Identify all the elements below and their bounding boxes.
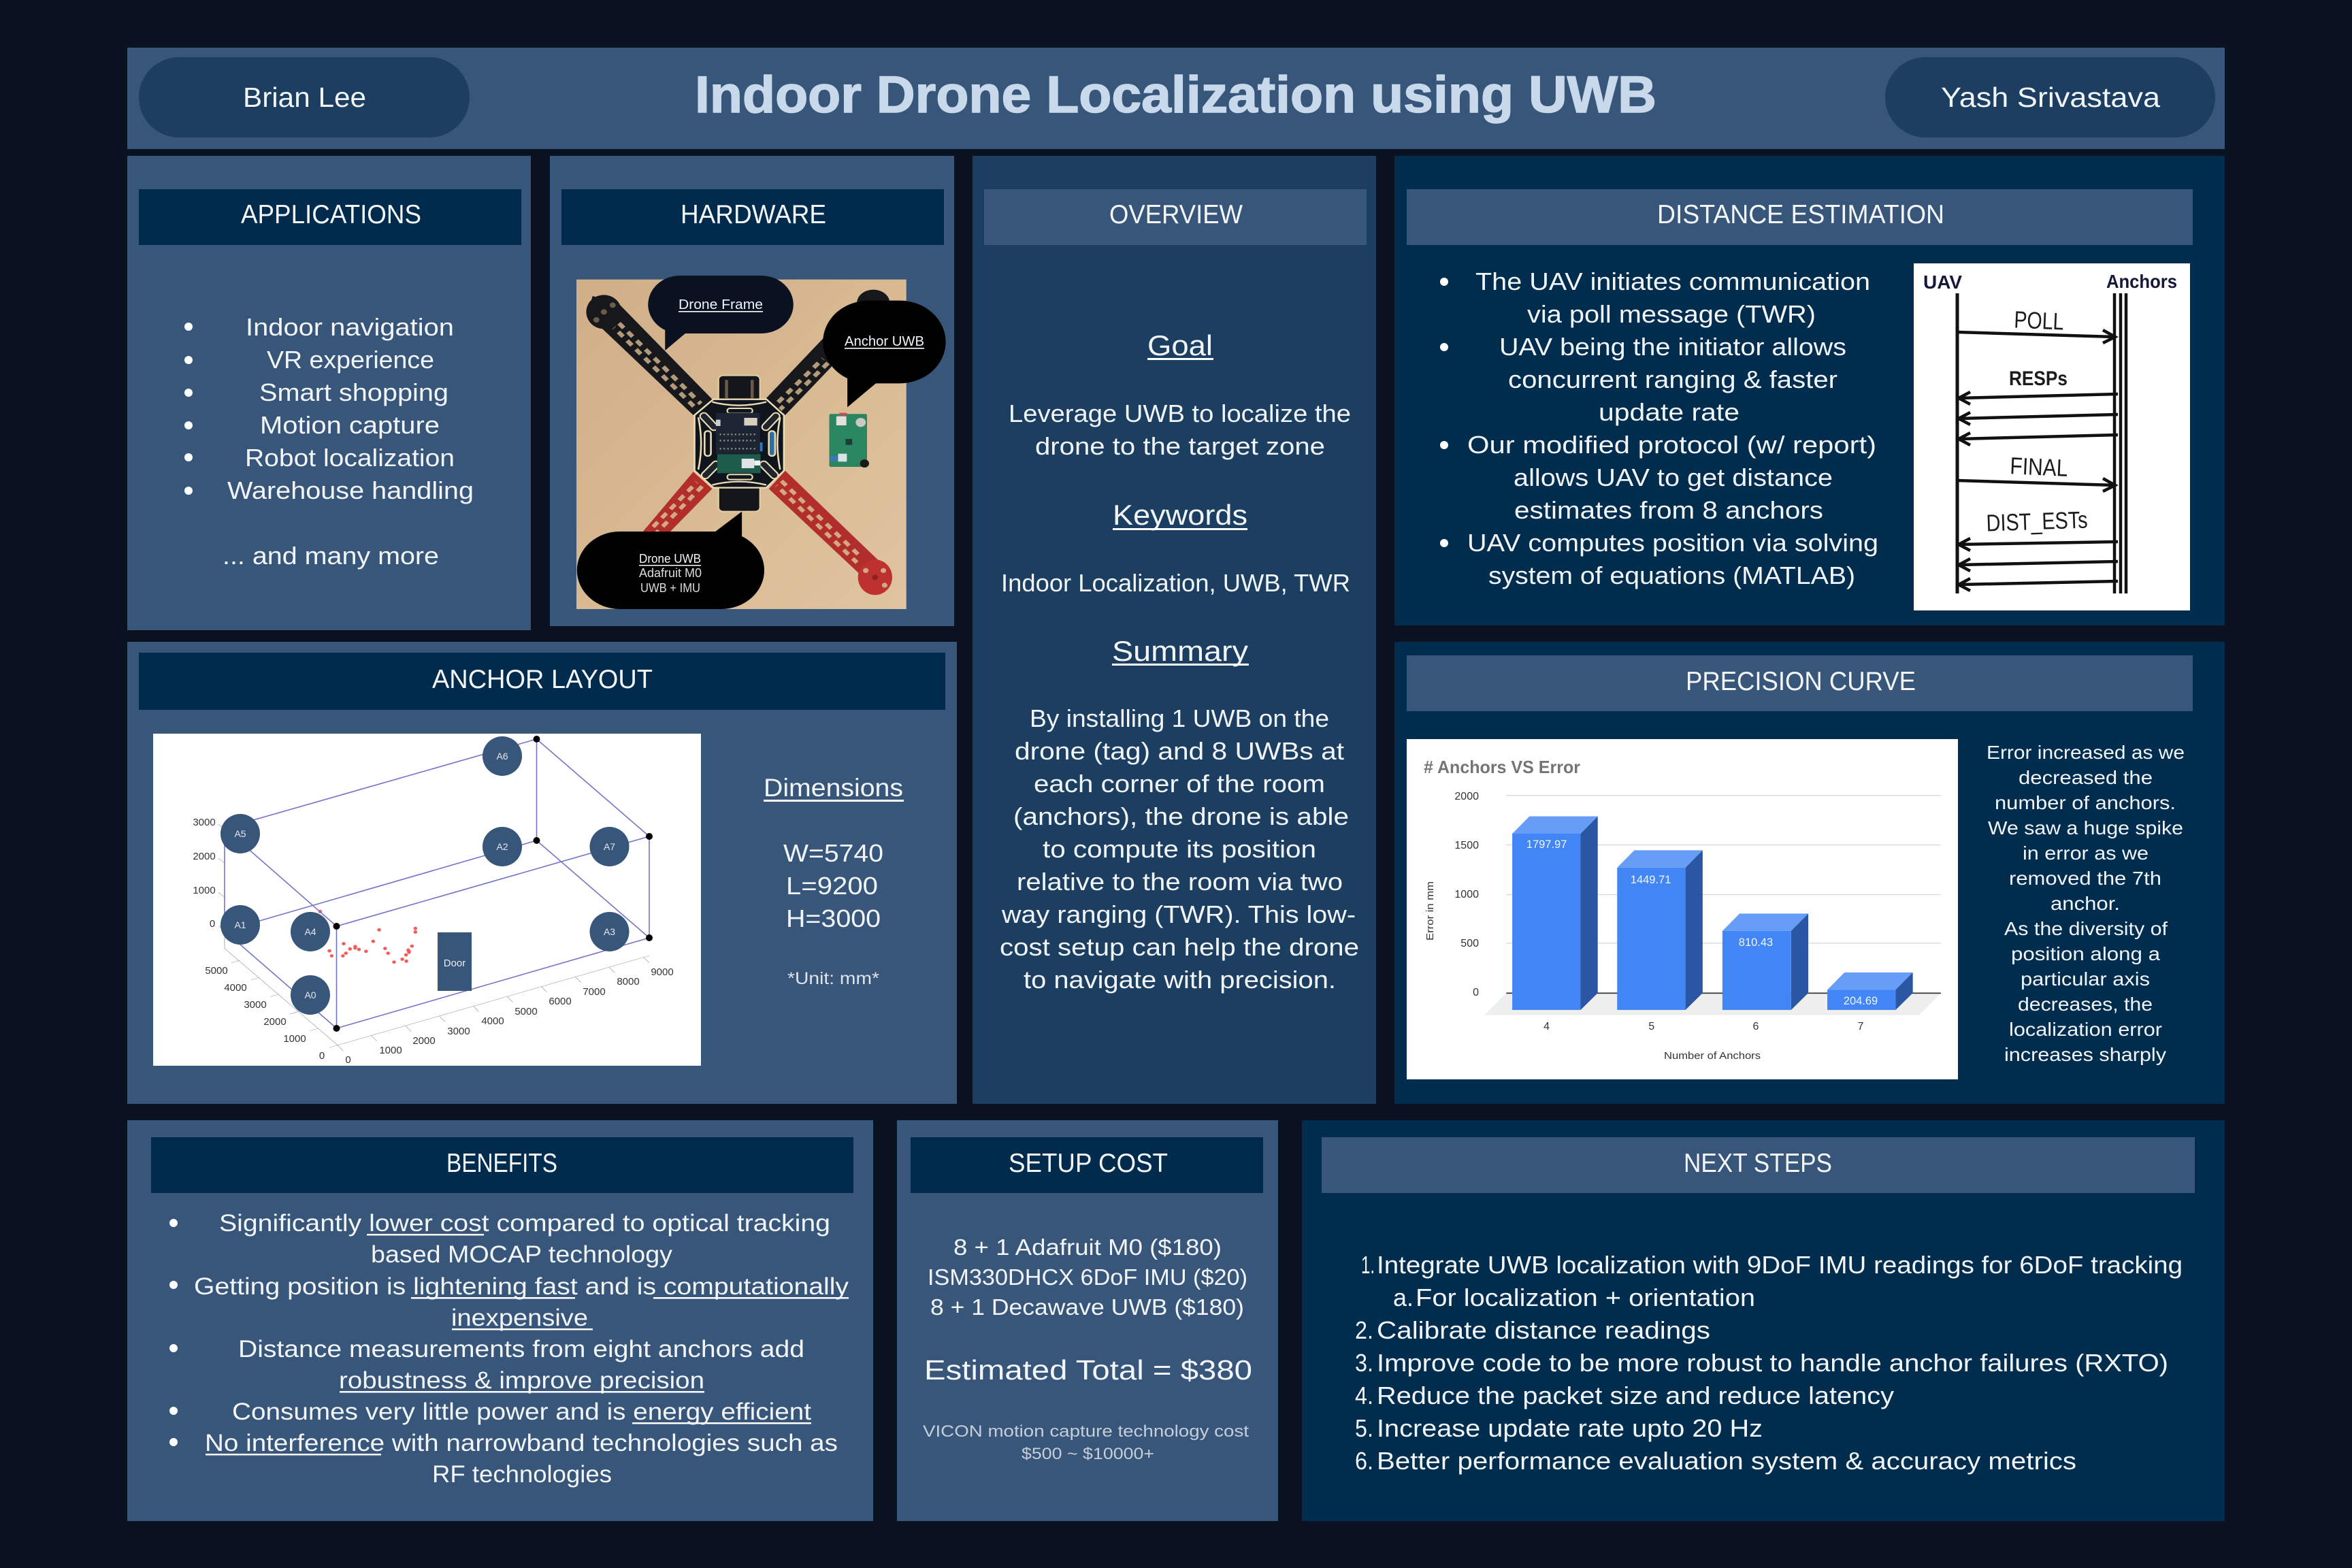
3D anchor plot: A4 — [304, 926, 316, 937]
3D anchor plot: 1000 — [283, 1033, 306, 1045]
next steps list — [1355, 1251, 2183, 1475]
distance estimation bullets: The UAV initiates communication — [1475, 267, 1870, 295]
3D anchor plot: A3 — [604, 926, 615, 937]
bar chart: anchors vs error: 6 — [1753, 1021, 1759, 1032]
panel: setup cost — [897, 1120, 1278, 1521]
bar chart: anchors vs error: 810.43 — [1739, 936, 1773, 949]
heading: overview: OVERVIEW — [1109, 200, 1243, 229]
keywords block: Keywords — [1113, 499, 1247, 531]
callout: drone UWB: UWB + IMU — [640, 581, 700, 595]
3D anchor plot: 0 — [345, 1054, 351, 1066]
bar chart: anchors vs error: 4 — [1544, 1021, 1550, 1032]
benefits list: Significantly lower cost compared to optical tracking — [219, 1210, 830, 1237]
3D anchor plot: 0 — [319, 1050, 325, 1062]
callout: drone frame: Drone Frame — [679, 297, 763, 312]
applications list: ... and many more — [223, 542, 439, 570]
benefits list — [169, 1210, 849, 1488]
distance estimation bullets: update rate — [1599, 398, 1740, 426]
bar chart: anchors vs error: 1797.97 — [1526, 838, 1567, 851]
bar chart: anchors vs error: # Anchors VS Error — [1424, 757, 1580, 777]
parts list: ISM330DHCX 6DoF IMU ($20) — [928, 1264, 1247, 1290]
title: Indoor Drone Localization using UWB — [695, 66, 1656, 124]
benefits list: Distance measurements from eight anchors add — [238, 1336, 804, 1362]
summary block: (anchors), the drone is able — [1013, 802, 1349, 830]
VICON comparison note: VICON motion capture technology cost — [923, 1422, 1249, 1441]
3D anchor plot: 4000 — [224, 982, 247, 994]
summary block — [1000, 635, 1359, 994]
dimensions block: L=9200 — [786, 872, 878, 900]
dimensions block: *Unit: mm* — [787, 969, 879, 988]
3D anchor plot: A1 — [234, 919, 246, 930]
next steps list: 3. — [1355, 1349, 1373, 1377]
summary block: By installing 1 UWB on the — [1030, 704, 1329, 732]
3D anchor plot: 5000 — [514, 1006, 538, 1017]
3D anchor plot: 2000 — [412, 1035, 436, 1047]
protocol sequence diagram: DIST_ESTs — [1986, 506, 2088, 537]
next steps list: Increase update rate upto 20 Hz — [1377, 1414, 1763, 1442]
panel: precision curve — [1394, 642, 2225, 1104]
benefits list: robustness & improve precision — [339, 1367, 704, 1394]
next steps list: Improve code to be more robust to handle anchor failures (RXTO) — [1377, 1349, 2168, 1377]
3D anchor plot: 1000 — [193, 885, 216, 896]
panel: overview — [973, 156, 1376, 1104]
3D anchor plot: 7000 — [583, 986, 606, 998]
next steps list: Calibrate distance readings — [1377, 1316, 1710, 1344]
3D anchor plot: 3000 — [244, 999, 267, 1011]
dimensions block — [764, 774, 904, 988]
precision commentary: number of anchors. — [1995, 792, 2176, 813]
VICON comparison note — [923, 1422, 1249, 1463]
VICON comparison note: $500 ~ $10000+ — [1022, 1445, 1154, 1463]
3D anchor plot: 2000 — [193, 851, 216, 862]
protocol sequence diagram: FINAL — [2010, 453, 2068, 482]
bar chart: anchors vs error: 1449.71 — [1631, 874, 1671, 886]
heading: distance estimation: DISTANCE ESTIMATION — [1657, 200, 1944, 229]
heading: hardware — [561, 189, 944, 245]
dimensions block: W=5740 — [783, 839, 883, 867]
3D anchor plot: 9000 — [651, 966, 674, 978]
bar chart: anchors vs error: 5 — [1648, 1021, 1654, 1032]
benefits list: No interference with narrowband technologies such as — [205, 1430, 838, 1456]
protocol sequence diagram: Anchors — [2106, 271, 2177, 292]
dimensions block: H=3000 — [786, 904, 881, 932]
bar chart: anchors vs error: Number of Anchors — [1664, 1050, 1761, 1062]
goal block: Leverage UWB to localize the — [1009, 399, 1351, 427]
heading: precision curve — [1407, 655, 2193, 711]
benefits list: RF technologies — [432, 1461, 612, 1488]
distance estimation bullets: UAV being the initiator allows — [1499, 333, 1846, 361]
heading: hardware: HARDWARE — [681, 200, 826, 229]
distance estimation bullets: Our modified protocol (w/ report) — [1467, 431, 1876, 459]
parts list: 8 + 1 Decawave UWB ($180) — [930, 1294, 1244, 1320]
bar chart: anchors vs error: 500 — [1460, 938, 1479, 949]
bar chart: anchors vs error: 1500 — [1454, 840, 1479, 851]
precision commentary: anchor. — [2051, 893, 2120, 914]
heading: setup cost: SETUP COST — [1009, 1149, 1168, 1178]
precision commentary: particular axis — [2021, 968, 2150, 990]
distance estimation bullets: concurrent ranging & faster — [1508, 365, 1838, 393]
precision commentary: removed the 7th — [2009, 868, 2161, 889]
summary block: to compute its position — [1043, 835, 1316, 863]
goal block — [1009, 329, 1351, 460]
precision commentary: decreased the — [2019, 767, 2153, 788]
bar chart: anchors vs error: Error in mm — [1424, 881, 1436, 941]
heading: next steps — [1322, 1137, 2195, 1193]
protocol sequence diagram: POLL — [2014, 306, 2064, 336]
applications list: VR experience — [267, 346, 434, 374]
protocol sequence diagram: UAV — [1923, 272, 1962, 293]
distance estimation bullets: UAV computes position via solving — [1467, 529, 1878, 557]
next steps list: 1. — [1361, 1251, 1375, 1279]
callout: drone UWB: Drone UWB — [639, 552, 701, 566]
3D anchor plot: 8000 — [617, 976, 640, 987]
precision commentary: We saw a huge spike — [1988, 817, 2183, 838]
benefits list: based MOCAP technology — [371, 1241, 673, 1268]
summary block: drone (tag) and 8 UWBs at — [1015, 737, 1344, 765]
next steps list: For localization + orientation — [1416, 1284, 1755, 1311]
3D anchor plot: A7 — [604, 841, 615, 852]
callout: drone UWB — [639, 552, 702, 595]
bar chart: anchors vs error: 204.69 — [1844, 995, 1878, 1007]
estimated total: Estimated Total = $380 — [924, 1354, 1252, 1386]
drone photo illustration — [576, 276, 946, 609]
applications list: Smart shopping — [259, 378, 448, 406]
author pill: Yash Srivastava — [1885, 57, 2215, 137]
next steps list: Reduce the packet size and reduce latency — [1377, 1382, 1894, 1409]
callout: anchor UWB: Anchor UWB — [845, 334, 924, 349]
3D anchor plot: A5 — [234, 828, 246, 839]
summary block: relative to the room via two — [1017, 868, 1343, 896]
goal block: drone to the target zone — [1035, 432, 1325, 460]
precision commentary: As the diversity of — [2004, 918, 2168, 939]
parts list — [928, 1235, 1247, 1320]
heading: applications: APPLICATIONS — [241, 200, 421, 229]
precision commentary: decreases, the — [2018, 994, 2153, 1015]
next steps list: 4. — [1355, 1382, 1373, 1409]
panel: applications — [127, 156, 531, 630]
applications list: Warehouse handling — [227, 476, 474, 504]
next steps list: 6. — [1355, 1447, 1373, 1475]
panel: hardware — [550, 156, 954, 626]
author pill: Brian Lee: Brian Lee — [243, 82, 366, 113]
dimensions block: Dimensions — [764, 774, 903, 802]
author pill: Yash Srivastava: Yash Srivastava — [1941, 82, 2160, 113]
heading: overview — [984, 189, 1367, 245]
3D anchor plot: 6000 — [549, 996, 572, 1007]
benefits list: Consumes very little power and is energy efficient — [232, 1399, 811, 1425]
heading: benefits — [151, 1137, 853, 1193]
precision commentary: position along a — [2011, 943, 2160, 964]
applications list — [184, 313, 474, 570]
heading: benefits: BENEFITS — [446, 1149, 557, 1178]
next steps list: Integrate UWB localization with 9DoF IMU readings for 6DoF tracking — [1377, 1251, 2183, 1279]
summary block: each corner of the room — [1034, 770, 1325, 798]
3D anchor plot: 5000 — [205, 965, 228, 977]
next steps list: a. — [1393, 1284, 1414, 1311]
panel: anchor layout — [127, 642, 957, 1104]
benefits list: Getting position is lightening fast and is computationally — [194, 1273, 849, 1300]
3D anchor plot: 3000 — [447, 1026, 470, 1037]
precision commentary: Error increased as we — [1987, 742, 2185, 763]
precision commentary: increases sharply — [2004, 1044, 2166, 1065]
protocol sequence diagram — [1914, 263, 2190, 610]
bar chart: anchors vs error: 1000 — [1454, 889, 1479, 900]
keywords block: Indoor Localization, UWB, TWR — [1001, 569, 1350, 597]
summary block: to navigate with precision. — [1024, 966, 1336, 994]
distance estimation bullets: estimates from 8 anchors — [1514, 496, 1823, 524]
3D anchor plot — [153, 734, 701, 1066]
3D anchor plot: A2 — [496, 841, 508, 852]
keywords block — [1001, 499, 1350, 597]
applications list: Robot localization — [245, 444, 455, 472]
next steps list: 5. — [1355, 1414, 1373, 1442]
heading: applications — [139, 189, 521, 245]
heading: anchor layout: ANCHOR LAYOUT — [432, 665, 653, 694]
header band — [127, 48, 2225, 149]
distance estimation bullets: via poll message (TWR) — [1527, 300, 1816, 328]
bar chart: anchors vs error: 2000 — [1454, 791, 1479, 802]
3D anchor plot: A6 — [496, 751, 508, 762]
heading: distance estimation — [1407, 189, 2193, 245]
panel: next steps — [1302, 1120, 2225, 1521]
3D anchor plot: Door — [444, 958, 466, 969]
summary block: Summary — [1112, 635, 1248, 667]
bar chart: anchors vs error: 0 — [1473, 987, 1479, 998]
3D anchor plot: 3000 — [193, 817, 216, 828]
applications list: Motion capture — [260, 411, 440, 439]
bar chart: anchors vs error — [1407, 739, 1958, 1079]
heading: anchor layout — [139, 653, 945, 710]
panel: distance estimation — [1394, 156, 2225, 625]
parts list: 8 + 1 Adafruit M0 ($180) — [953, 1235, 1222, 1260]
distance estimation bullets — [1440, 267, 1878, 589]
author pill: Brian Lee — [139, 57, 470, 137]
summary block: way ranging (TWR). This low- — [1001, 900, 1356, 928]
goal block: Goal — [1147, 329, 1213, 361]
heading: precision curve: PRECISION CURVE — [1686, 667, 1916, 696]
3D anchor plot: 1000 — [379, 1045, 402, 1056]
heading: setup cost — [911, 1137, 1263, 1193]
next steps list: Better performance evaluation system & accuracy metrics — [1377, 1447, 2076, 1475]
distance estimation bullets: allows UAV to get distance — [1514, 463, 1833, 491]
3D anchor plot: 0 — [210, 918, 215, 930]
heading: next steps: NEXT STEPS — [1684, 1149, 1832, 1178]
3D anchor plot: 2000 — [263, 1016, 287, 1028]
summary block: cost setup can help the drone — [1000, 933, 1359, 961]
callout: drone UWB: Adafruit M0 — [639, 566, 702, 580]
precision commentary — [1987, 742, 2185, 1065]
protocol sequence diagram: RESPs — [2009, 368, 2068, 390]
precision commentary: in error as we — [2023, 843, 2149, 864]
precision commentary: localization error — [2009, 1019, 2162, 1040]
bar chart: anchors vs error: 7 — [1858, 1021, 1864, 1032]
next steps list: 2. — [1355, 1316, 1373, 1344]
distance estimation bullets: system of equations (MATLAB) — [1488, 561, 1855, 589]
applications list: Indoor navigation — [246, 313, 454, 341]
3D anchor plot: A0 — [304, 990, 316, 1000]
benefits list: inexpensive — [451, 1305, 588, 1331]
3D anchor plot: 4000 — [481, 1015, 504, 1027]
panel: benefits — [127, 1120, 873, 1521]
